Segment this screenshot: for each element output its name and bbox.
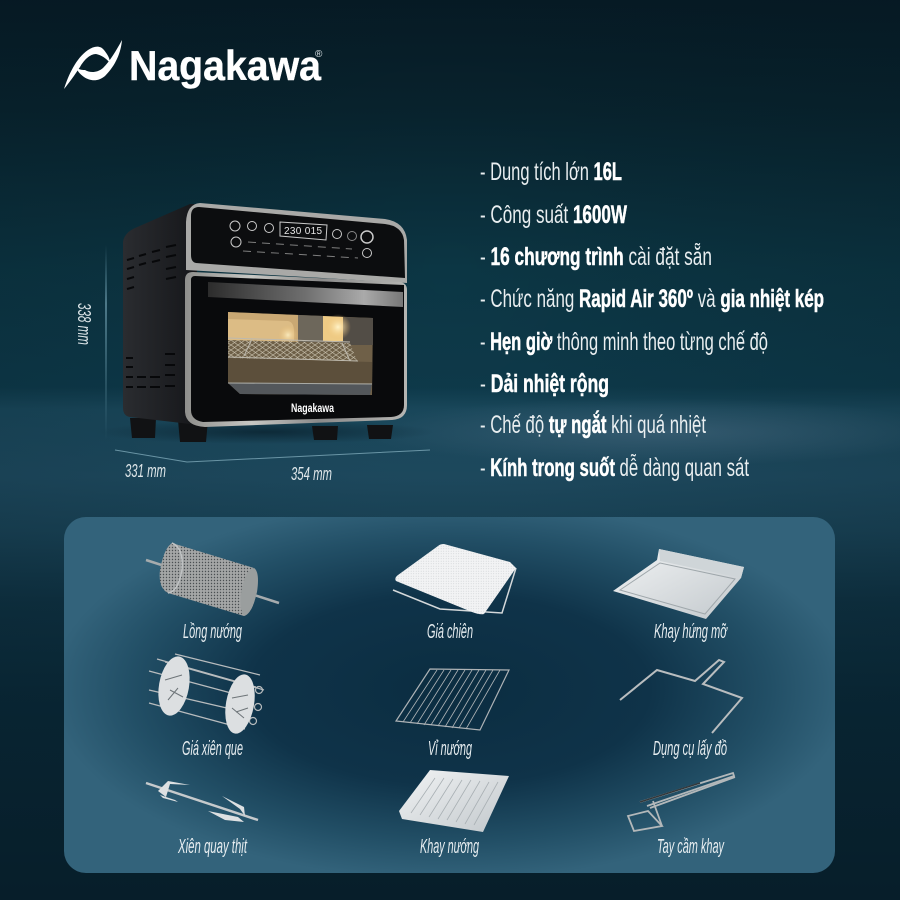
feature 4: - Chức năng Rapid Air 360º và gia nhiệt kép: [480, 285, 824, 313]
accessory: Khay nướng: Khay nướng: [420, 836, 479, 858]
oven window: [228, 312, 373, 395]
feature 1: - Dung tích lớn 16L: [480, 158, 622, 186]
accessory: Lồng nướng: [146, 543, 279, 643]
feature 8: - Kính trong suốt dễ dàng quan sát: [480, 453, 749, 482]
feature 2: - Công suất 1600W: [480, 201, 627, 229]
logo: Nagakawa: [64, 40, 323, 89]
accessory: Vỉ nướng: Vỉ nướng: [428, 738, 472, 760]
feature 6: - Dải nhiệt rộng: [480, 370, 609, 398]
control labels: [243, 242, 358, 258]
feature 7: - Chế độ tự ngắt khi quá nhiệt: [480, 409, 706, 439]
oven shadow: [95, 420, 435, 444]
oven side body: [123, 204, 200, 424]
accessory: Xiên quay thịt: [146, 781, 258, 858]
dimension: height: 338 mm: [74, 303, 94, 345]
door frame: [185, 272, 407, 427]
feature 5: - Hẹn giờ thông minh theo từng chế độ: [480, 328, 768, 356]
accessory: Khay hứng mỡ: [613, 549, 744, 643]
logo: Nagakawa: ®: [315, 49, 323, 60]
accessory: Tay cầm khay: Tay cầm khay: [657, 836, 725, 858]
panel: accessories: [64, 517, 835, 873]
oven product image: [95, 203, 435, 444]
accessory: Giá xiên que: [149, 654, 264, 760]
feature 3: - 16 chương trình cài đặt sẵn: [480, 242, 712, 271]
accessory: Giá chiên: [393, 544, 516, 643]
accessory: Vỉ nướng: [396, 669, 509, 760]
dimension lines: [106, 245, 430, 462]
feet: [130, 418, 393, 442]
control panel: [186, 203, 407, 283]
control buttons: [230, 221, 373, 258]
accessory: Xiên quay thịt: Xiên quay thịt: [177, 836, 248, 858]
accessory: Giá xiên que: Giá xiên que: [182, 738, 243, 760]
door handle: [208, 282, 403, 307]
oven brand: Nagakawa: [291, 403, 334, 415]
accessory: Khay nướng: [399, 770, 509, 858]
accessory: Tay cầm khay: [628, 773, 735, 858]
side vents: [126, 245, 176, 387]
oven rack: [228, 340, 357, 361]
dimension: depth: 331 mm: [125, 461, 166, 481]
accessory: Dụng cụ lấy đồ: Dụng cụ lấy đồ: [653, 738, 727, 760]
logo: Nagakawa: Nagakawa: [129, 42, 322, 89]
feature list: [480, 158, 824, 482]
accessory: Dụng cụ lấy đồ: [620, 660, 742, 760]
dimension: width: 354 mm: [291, 464, 332, 484]
accessory: Khay hứng mỡ: Khay hứng mỡ: [654, 621, 728, 643]
accessory: Lồng nướng: Lồng nướng: [183, 621, 242, 643]
control display: 230 015: [284, 226, 322, 237]
accessory: Giá chiên: Giá chiên: [427, 621, 473, 643]
